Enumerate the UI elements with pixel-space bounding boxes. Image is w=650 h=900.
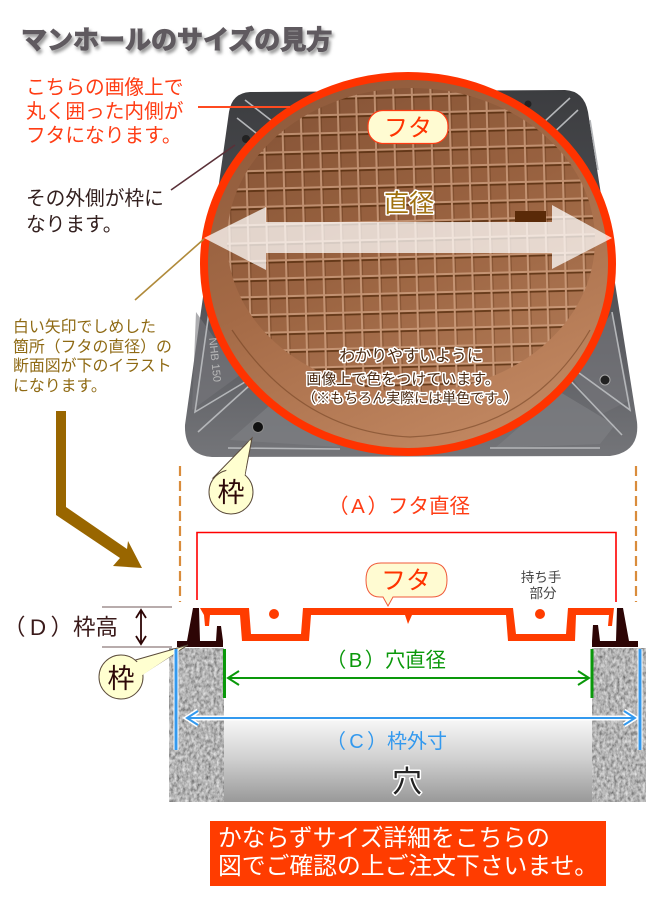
label: hole: 穴 xyxy=(392,766,422,799)
call to action xyxy=(210,821,606,886)
white diameter arrow xyxy=(204,205,612,270)
label: A lid diameter: フタ直径 xyxy=(388,495,470,518)
callout: frame on photo xyxy=(209,438,253,514)
label: lid bubble xyxy=(366,563,447,606)
frame plate xyxy=(185,90,637,457)
note on colouring: 画像上で色をつけています。 xyxy=(306,371,500,388)
text: outside is frame: なります。 xyxy=(26,214,122,236)
note on colouring xyxy=(302,347,518,406)
text: inside circle is lid: 丸く囲った内側が xyxy=(26,101,184,123)
cross section xyxy=(169,608,646,802)
text: outside is frame: その外側が枠に xyxy=(26,188,164,210)
label: B hole diameter: （B） xyxy=(326,649,385,672)
concrete right xyxy=(592,648,646,802)
note on colouring: わかりやすいように xyxy=(339,347,483,365)
manhole photo xyxy=(185,76,637,457)
leader line: frame xyxy=(171,145,235,190)
label: handle part: 持ち手 xyxy=(521,570,561,585)
callout: frame on photo: 枠 xyxy=(218,478,244,508)
leader line: cross section xyxy=(135,239,204,300)
callout: frame on section: 枠 xyxy=(108,664,134,694)
note on colouring: （※もちろん実際には単色です。） xyxy=(302,390,518,406)
lid xyxy=(204,76,612,452)
text: white arrow explanation: 断面図が下のイラスト xyxy=(13,357,172,375)
dimension: C frame outer xyxy=(176,649,640,750)
dashed guide lines xyxy=(180,466,636,602)
brown arrow to cross section xyxy=(56,411,142,568)
leader line: lid xyxy=(198,106,290,108)
hole xyxy=(224,712,592,802)
dimension: D frame height xyxy=(102,607,172,647)
text: inside circle is lid: こちらの画像上で xyxy=(26,77,184,99)
label: lid pill: フタ xyxy=(384,115,432,142)
bracket: A lid diameter xyxy=(197,532,616,602)
frame plate: NHB 150 xyxy=(206,337,223,383)
text: white arrow explanation: 箇所（フタの直径）の xyxy=(13,338,172,356)
frame section left xyxy=(177,608,223,647)
lid section xyxy=(200,608,614,641)
text: inside circle is lid: フタになります。 xyxy=(26,125,182,147)
label: handle part: 部分 xyxy=(530,586,557,601)
label: D frame height: （D） xyxy=(3,615,73,640)
concrete left xyxy=(169,648,224,802)
red ring around lid xyxy=(204,76,612,452)
callout: frame on section xyxy=(99,645,188,699)
text: white arrow explanation: 白い矢印でしめした xyxy=(13,318,156,336)
label: diameter: 直径 xyxy=(384,190,434,218)
frame section right xyxy=(592,608,638,647)
title: マンホールのサイズの見方 xyxy=(21,25,332,55)
label: lid pill xyxy=(368,110,448,144)
label: lid bubble: フタ xyxy=(381,567,431,595)
text: white arrow explanation: になります。 xyxy=(13,377,107,395)
call to action: かならずサイズ詳細をこちらの xyxy=(218,825,550,852)
label: C frame outer: （C） xyxy=(326,730,387,753)
label: C frame outer: 枠外寸 xyxy=(387,730,447,753)
handle dots xyxy=(269,609,279,619)
label: D frame height: 枠高 xyxy=(73,615,118,640)
call to action: 図でご確認の上ご注文下さいませ。 xyxy=(218,853,598,880)
label: A lid diameter: （A） xyxy=(328,495,388,518)
label: B hole diameter: 穴直径 xyxy=(385,649,446,672)
dimension: B hole diameter xyxy=(224,649,592,698)
